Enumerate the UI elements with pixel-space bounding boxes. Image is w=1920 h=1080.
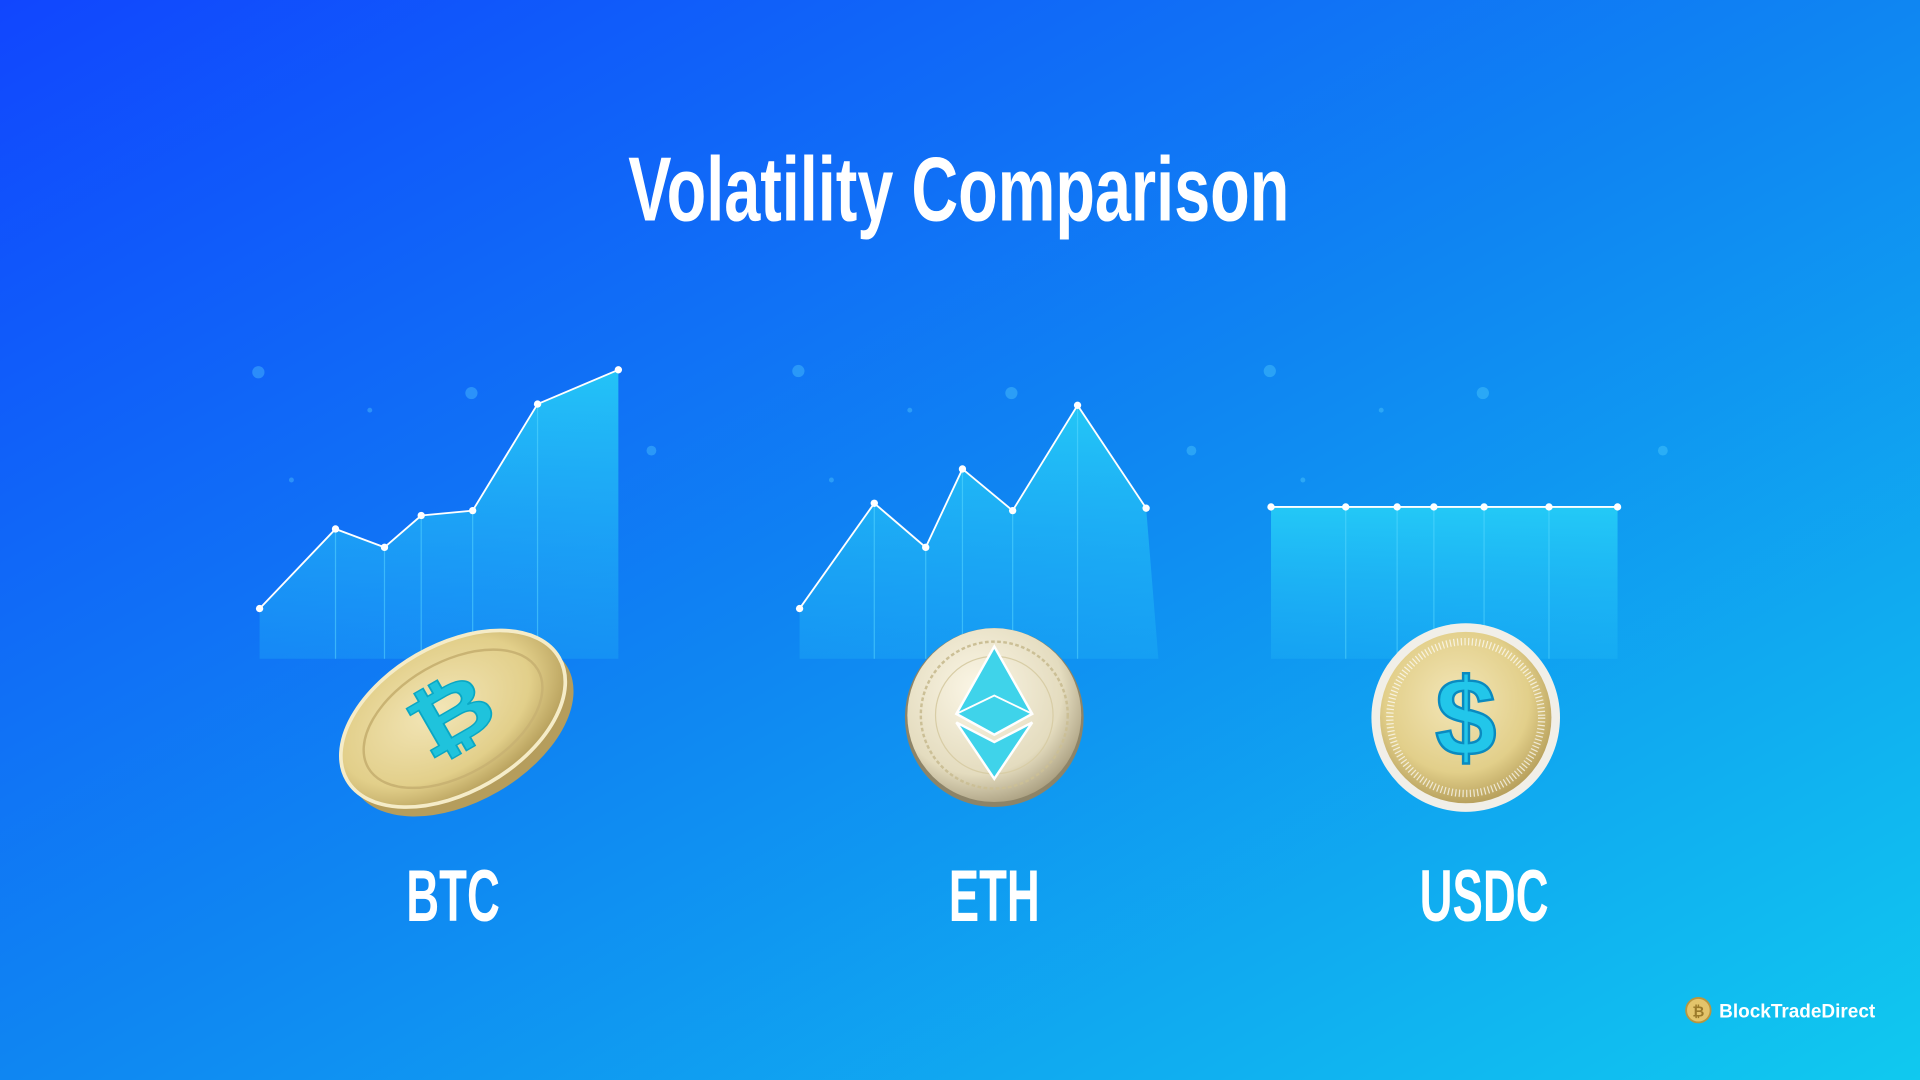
chart: BTC [256,366,622,659]
label: USDC: USDC [1420,855,1549,936]
label: ETH: ETH [949,855,1040,936]
icon: ETH coin [905,628,1084,807]
label: BTC: BTC [406,855,500,936]
icon: USDC coin: $ [1435,657,1496,780]
icon: BTC coin [310,593,604,854]
logo: BlockTradeDirect: ₿ [1692,1004,1704,1020]
icon: BTC coin: ₿ [392,655,510,776]
icon: USDC coin [1371,623,1560,812]
chart: ETH [796,402,1158,659]
title: Volatility Comparison [628,139,1289,240]
logo: BlockTradeDirect: BlockTradeDirect [1719,1002,1876,1023]
chart: USDC [1267,503,1621,659]
